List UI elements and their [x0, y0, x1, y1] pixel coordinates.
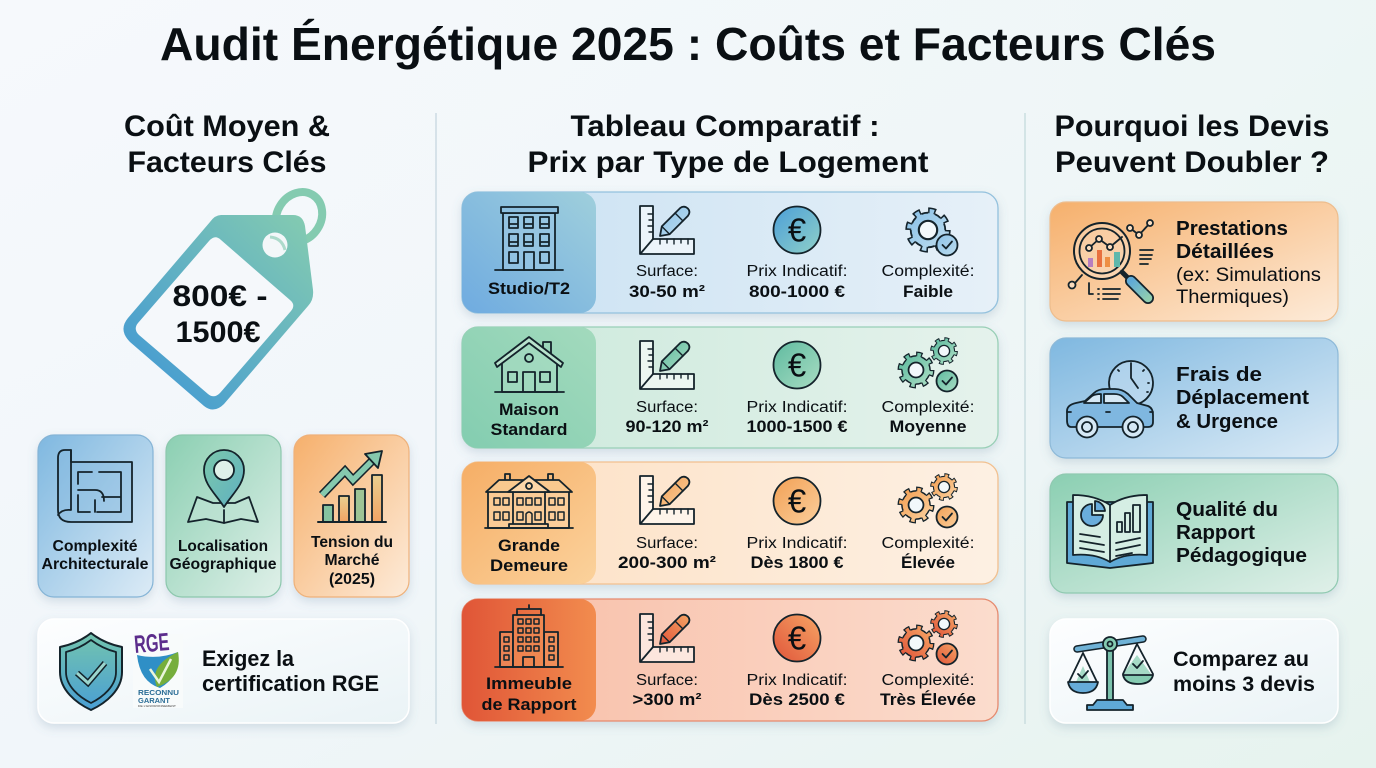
price: Prix Indicatif: — [746, 535, 848, 552]
label: Détaillées — [1176, 240, 1274, 263]
complexity — [882, 263, 974, 301]
surface: Surface: — [636, 263, 698, 280]
heading: coût moyen: Facteurs Clés — [128, 146, 326, 179]
heading: pourquoi les devis — [1054, 110, 1330, 179]
label: Thermiques) — [1176, 286, 1289, 308]
label: Exigez la — [202, 646, 294, 671]
logo: RGE: GARANT — [138, 696, 170, 705]
logo: RGE: DE L'ENVIRONNEMENT — [138, 705, 177, 708]
label: Frais de — [1176, 363, 1262, 386]
label — [1176, 498, 1307, 567]
label: (2025) — [329, 571, 375, 588]
label: Comparez au — [1173, 648, 1309, 671]
icon: shield — [60, 633, 122, 710]
tag hole — [262, 232, 288, 258]
icon: ruler and pencil — [640, 476, 694, 524]
label — [1173, 648, 1315, 696]
price — [746, 672, 848, 709]
complexity — [882, 399, 974, 436]
name: Immeuble — [486, 674, 572, 693]
icon: euro — [774, 342, 820, 388]
logo: RGE: RGE — [133, 628, 170, 659]
row: maison — [462, 327, 998, 448]
row: grande demeure — [462, 462, 998, 584]
row: immeuble de rapport — [462, 599, 998, 721]
label: Localisation — [178, 538, 268, 555]
icon: open book — [1067, 495, 1153, 568]
label: Pédagogique — [1176, 544, 1307, 567]
heading: coût moyen — [124, 110, 330, 179]
label: moins 3 devis — [1173, 673, 1315, 696]
price: Prix Indicatif: — [746, 399, 848, 416]
name — [490, 536, 568, 575]
label: Tension du — [311, 534, 393, 551]
label: Marché — [324, 552, 380, 569]
label: Architecturale — [42, 556, 149, 573]
column divider left — [435, 113, 437, 724]
name: Maison — [499, 400, 559, 419]
icon: car and clock — [1067, 361, 1153, 438]
row: studio — [462, 192, 998, 313]
label — [170, 538, 277, 573]
label: Rapport — [1176, 521, 1255, 544]
surface — [632, 672, 702, 709]
icon: gears — [902, 613, 958, 664]
price: Prix Indicatif: — [746, 263, 848, 280]
tag price: 1500€ — [176, 316, 260, 349]
name — [482, 674, 577, 714]
surface: Surface: — [636, 672, 698, 689]
icon: euro — [774, 614, 820, 662]
card: prestations détaillées — [1050, 202, 1338, 321]
icon: magnifier — [1068, 220, 1153, 299]
complexity: Complexité: — [882, 535, 974, 552]
heading: pourquoi les devis: Peuvent Doubler ? — [1055, 146, 1329, 179]
title: Audit Énergétique 2025 : Coûts et Facteurs Clés — [160, 18, 1216, 70]
complexity: Faible — [903, 282, 953, 301]
price: 800-1000 € — [749, 282, 846, 301]
icon: building — [495, 207, 563, 270]
icon: blueprint — [58, 450, 132, 522]
name — [490, 400, 568, 439]
name: Studio/T2 — [488, 279, 570, 298]
price — [746, 399, 848, 436]
logo: RGE: RECONNU — [138, 688, 179, 697]
icon: map pin — [188, 450, 258, 523]
icon: gears — [902, 340, 958, 392]
icon: ruler and pencil — [640, 206, 694, 254]
icon: gear — [911, 213, 958, 256]
card: localisation géographique — [166, 435, 281, 597]
icon: euro — [774, 478, 820, 524]
surface — [618, 535, 716, 572]
card: frais de déplacement — [1050, 338, 1338, 458]
card: comparez au moins 3 devis — [1050, 619, 1338, 723]
heading: tableau comparatif: Prix par Type de Logement — [528, 146, 929, 179]
complexity: Élevée — [901, 553, 955, 572]
surface: >300 m² — [632, 690, 702, 709]
complexity: Très Élevée — [880, 690, 976, 709]
card: complexité architecturale — [38, 435, 153, 597]
icon: tag loop — [267, 183, 331, 251]
icon: ruler and pencil — [640, 614, 694, 662]
label: Prestations — [1176, 217, 1288, 240]
tag price: 800€ - — [172, 280, 268, 313]
heading: tableau comparatif — [528, 110, 929, 179]
complexity — [882, 535, 974, 572]
icon: gears — [902, 476, 958, 528]
complexity: Complexité: — [882, 399, 974, 416]
complexity: Moyenne — [890, 417, 966, 436]
label: Qualité du — [1176, 498, 1278, 521]
label — [1176, 217, 1321, 308]
icon: manor — [485, 474, 573, 528]
icon: apartment tower — [495, 605, 563, 667]
price tag — [123, 183, 331, 410]
label — [202, 646, 379, 696]
surface: 90-120 m² — [626, 417, 709, 436]
surface — [626, 399, 709, 436]
label — [311, 534, 393, 588]
card: certification RGE — [38, 619, 409, 723]
icon: ruler and pencil — [640, 341, 694, 389]
heading: pourquoi les devis: Pourquoi les Devis — [1054, 110, 1330, 143]
price — [746, 263, 848, 301]
icon: euro — [774, 206, 820, 254]
tag inner panel — [136, 237, 293, 396]
card: qualité du rapport — [1050, 474, 1338, 593]
icon: house — [495, 337, 564, 392]
surface: 30-50 m² — [629, 282, 705, 301]
label: Complexité — [52, 538, 138, 555]
heading: tableau comparatif: Tableau Comparatif : — [570, 110, 880, 143]
name: Standard — [490, 420, 568, 439]
label — [1176, 363, 1309, 433]
label: Géographique — [170, 556, 277, 573]
heading: coût moyen: Coût Moyen & — [124, 110, 330, 143]
logo: RGE — [133, 628, 183, 708]
name: de Rapport — [482, 695, 577, 714]
icon: balance scales — [1068, 637, 1153, 710]
label: & Urgence — [1176, 410, 1278, 433]
icon: growth chart — [318, 451, 386, 522]
surface: 200-300 m² — [618, 553, 716, 572]
label: certification RGE — [202, 671, 379, 696]
price: Prix Indicatif: — [746, 672, 848, 689]
price: Dès 2500 € — [749, 690, 846, 709]
label: (ex: Simulations — [1176, 264, 1321, 286]
label — [42, 538, 149, 573]
surface: Surface: — [636, 535, 698, 552]
surface — [629, 263, 705, 301]
tag price — [172, 280, 268, 349]
complexity: Complexité: — [882, 672, 974, 689]
complexity — [880, 672, 976, 709]
complexity: Complexité: — [882, 263, 974, 280]
surface: Surface: — [636, 399, 698, 416]
price: Dès 1800 € — [750, 553, 844, 572]
card: tension du marché — [294, 435, 409, 597]
price — [746, 535, 848, 572]
name: Grande — [498, 536, 560, 555]
label: Déplacement — [1176, 386, 1309, 409]
name: Demeure — [490, 556, 568, 575]
price: 1000-1500 € — [746, 417, 848, 436]
icon: tag body — [123, 215, 313, 410]
column divider right — [1024, 113, 1026, 724]
